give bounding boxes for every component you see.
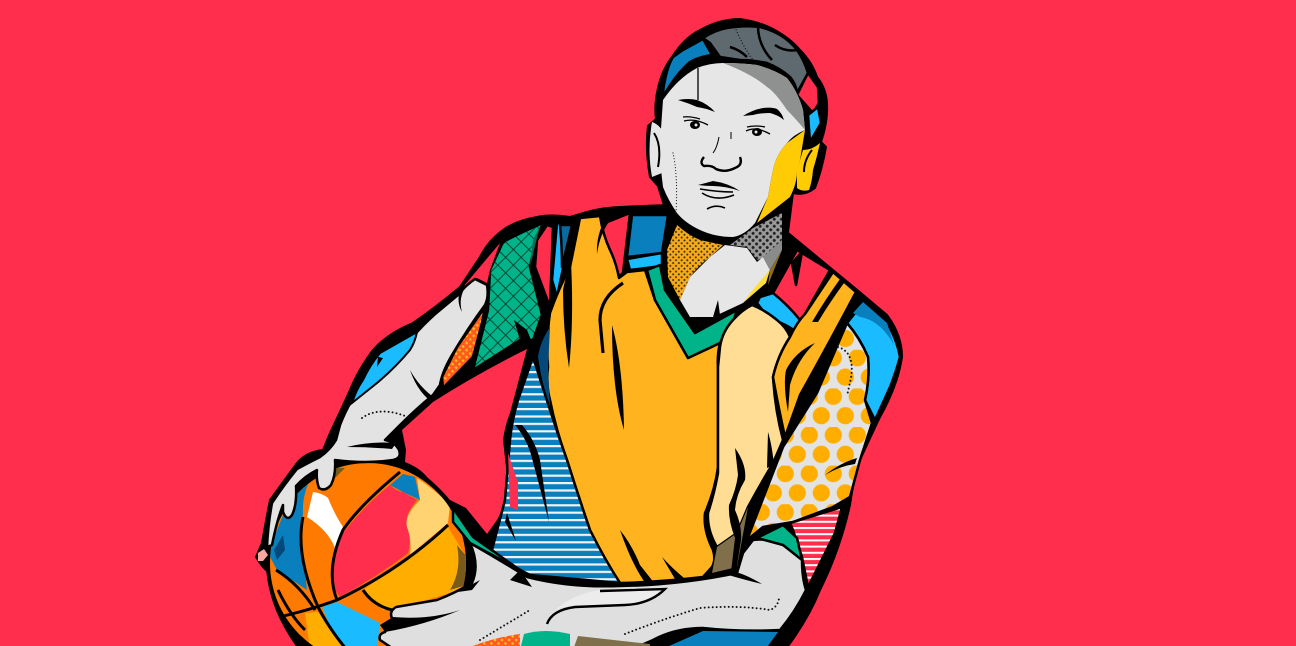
upper arm blue panels [847,302,900,420]
shoulder colour panels [535,213,830,335]
illustration: basketball player [256,19,902,646]
right forearm and hand [380,540,806,646]
jersey strap [773,272,856,437]
head silhouette [647,19,827,240]
left arm and hand [267,279,488,547]
cheek and ear yellow [757,130,820,223]
arm details [258,284,485,561]
hair [663,26,821,142]
beige panel shadow [712,507,748,573]
face [660,63,805,237]
forearm details [380,508,802,640]
left sleeve [463,223,543,370]
red side strip [508,453,518,510]
right arm dotted line [838,347,852,396]
collar [647,265,737,358]
left ear [650,122,662,177]
red striped panel [790,507,842,587]
bottom jersey patches [463,631,778,646]
polka dot arm [747,323,872,540]
facial features [654,68,812,213]
jersey shadow strip [538,327,550,407]
forehead shadow [723,63,805,130]
jersey fold lines [505,217,857,584]
striped side panel [492,357,620,583]
basketball [266,463,466,646]
gap between arm and torso [402,349,527,534]
body silhouette [256,205,902,646]
neck [667,213,782,317]
beige panel [708,305,790,547]
jersey body [547,216,720,583]
